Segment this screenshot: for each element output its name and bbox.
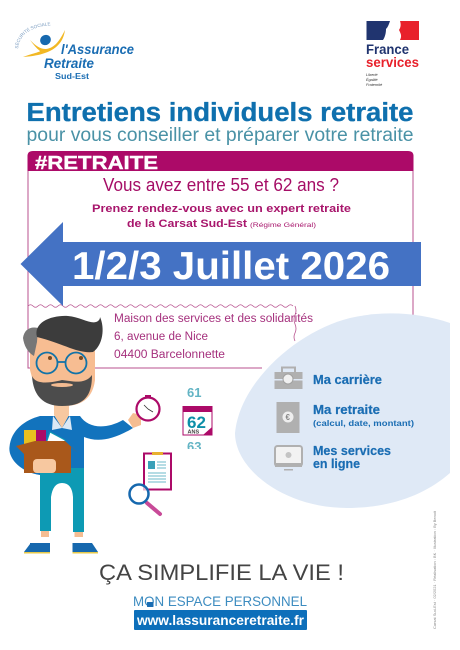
arrow with date: 1/2/3 Juillet 2026 — [72, 245, 390, 288]
logo: France services: Liberté — [366, 73, 378, 77]
ankles — [41, 531, 83, 537]
handwritten question: Vous avez entre 55 et 62 ans ? — [103, 175, 339, 195]
legs — [40, 465, 84, 532]
blue blob panel — [235, 313, 450, 508]
glasses — [36, 352, 86, 374]
shoes — [24, 543, 98, 552]
raised hand — [128, 413, 141, 428]
icon: briefcase — [274, 368, 302, 389]
logo: France services — [366, 21, 419, 87]
icon: calendar 62 ans — [182, 388, 212, 449]
appointment text — [92, 203, 351, 230]
address: Maison des services et des solidarités — [114, 313, 313, 325]
logo: l'Assurance Retraite Sud-Est: Retraite — [44, 56, 94, 71]
icon: calendar 62 ans: ANS — [188, 430, 199, 436]
icon: document with magnifier — [130, 452, 171, 514]
icon: retirement document: € — [286, 413, 290, 422]
label: ma retraite — [313, 403, 414, 428]
appointment text: Prenez rendez-vous avec un expert retraite — [92, 203, 351, 215]
logo: l'Assurance Retraite Sud-Est — [15, 22, 134, 81]
address — [114, 313, 313, 361]
label: ma retraite: Ma retraite — [313, 403, 380, 417]
logo: France services: France — [366, 42, 409, 57]
icon: calendar 62 ans: 62 — [187, 413, 206, 432]
logo: l'Assurance Retraite Sud-Est: l'Assurance — [61, 42, 134, 57]
logo: France services: Fraternité — [366, 83, 382, 87]
panel: #retraite — [28, 151, 414, 368]
box — [16, 441, 78, 473]
panel header — [28, 151, 414, 171]
mon espace personnel: MON ESPACE PERSONNEL — [133, 593, 307, 609]
illustration: man with box — [9, 316, 141, 554]
label: mes services en ligne — [313, 443, 391, 471]
website button: www.lassuranceretraite.fr — [136, 612, 305, 628]
label: mes services en ligne: Mes services — [313, 443, 391, 458]
eyes — [48, 356, 52, 360]
face — [30, 335, 95, 406]
icon: stopwatch — [136, 395, 160, 420]
slogan: ÇA SIMPLIFIE LA VIE ! — [99, 560, 344, 585]
wavy separator — [28, 305, 296, 341]
arrow with date — [20, 222, 421, 306]
logo: l'Assurance Retraite Sud-Est: Sud-Est — [55, 72, 89, 81]
torso and arm — [9, 416, 133, 475]
subtitle: pour vous conseiller et préparer votre retraite — [26, 125, 414, 146]
box hand — [33, 459, 56, 473]
beard — [32, 375, 92, 406]
side hair — [23, 327, 38, 356]
icon: monitor — [275, 446, 302, 470]
logo: l'Assurance Retraite Sud-Est: SÉCURITÉ SOCIALE — [15, 22, 50, 48]
box contents — [24, 430, 36, 444]
label: mes services en ligne: en ligne — [313, 456, 360, 471]
logo: France services: services — [366, 55, 419, 70]
collar — [54, 404, 69, 428]
mouth — [51, 383, 73, 387]
vertical credits: Carsat Sud-Est · 02/2021 · Réalisation : BK · Illustration : By Benoit — [433, 511, 437, 629]
address: 6, avenue de Nice — [114, 331, 208, 343]
hair — [36, 316, 103, 352]
panel: #retraite: #RETRAITE — [35, 152, 158, 173]
label: ma carrière: Ma carrière — [313, 373, 382, 387]
label: ma retraite: (calcul, date, montant) — [313, 419, 414, 428]
logo: France services: Égalité — [366, 77, 378, 82]
icon: calendar 62 ans: 63 — [187, 439, 201, 454]
icon: calendar 62 ans: 61 — [187, 385, 201, 400]
title: Entretiens individuels retraite — [26, 99, 414, 127]
appointment text: de la Carsat Sud-Est — [127, 218, 247, 230]
address: 04400 Barcelonnette — [114, 349, 225, 361]
service list — [274, 368, 414, 471]
appointment text: (Régime Général) — [250, 222, 316, 229]
